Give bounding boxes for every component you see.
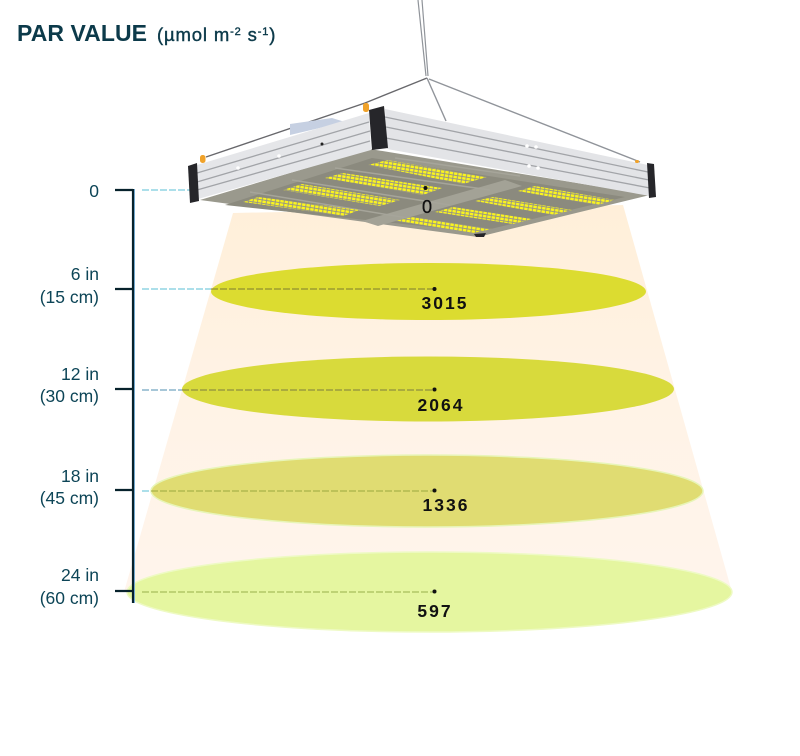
height labels: 6 in (71, 264, 99, 284)
title: -2 (230, 26, 242, 38)
central divider (362, 180, 522, 226)
PAR values: 1336 (423, 495, 469, 515)
height labels: 18 in (61, 466, 99, 486)
dashed leader lines (142, 190, 434, 592)
light pool: 18 in (151, 455, 703, 527)
height labels (40, 181, 99, 608)
light pool: 6 in (211, 263, 646, 320)
PAR values: 3015 (422, 293, 468, 313)
PAR value at fixture: 0 (422, 197, 432, 217)
orange hooks (200, 103, 639, 163)
height labels: 12 in (61, 364, 99, 384)
LED grow light fixture (188, 0, 656, 237)
height labels: (30 cm) (40, 386, 99, 406)
light cone (124, 205, 732, 592)
panel cross bars (250, 158, 520, 220)
light pool: 24 in (127, 552, 732, 632)
height labels: 24 in (61, 565, 99, 585)
height labels: (60 cm) (40, 588, 99, 608)
underside (200, 149, 650, 237)
measurement dots (432, 287, 436, 594)
hanging wires (206, 0, 640, 162)
corner brackets (188, 163, 199, 203)
title: PAR VALUE (17, 20, 147, 46)
right side rail (385, 109, 650, 196)
title: -1 (258, 26, 269, 38)
light pool: 12 in (182, 356, 674, 422)
title: (µmol m (157, 24, 230, 45)
LED strips (243, 160, 615, 233)
label plate (290, 118, 345, 135)
title: s (242, 24, 258, 45)
title (17, 20, 276, 46)
measurement dot: fixture (424, 186, 428, 190)
height labels: (15 cm) (40, 287, 99, 307)
PAR values (417, 293, 469, 621)
fixture holes (236, 144, 540, 170)
height labels: 0 (89, 181, 99, 201)
left side rail (197, 113, 371, 199)
PAR values: 597 (417, 601, 453, 621)
PAR values: 2064 (418, 395, 464, 415)
height labels: (45 cm) (40, 488, 99, 508)
height scale axis (115, 189, 134, 603)
title: ) (269, 24, 276, 45)
